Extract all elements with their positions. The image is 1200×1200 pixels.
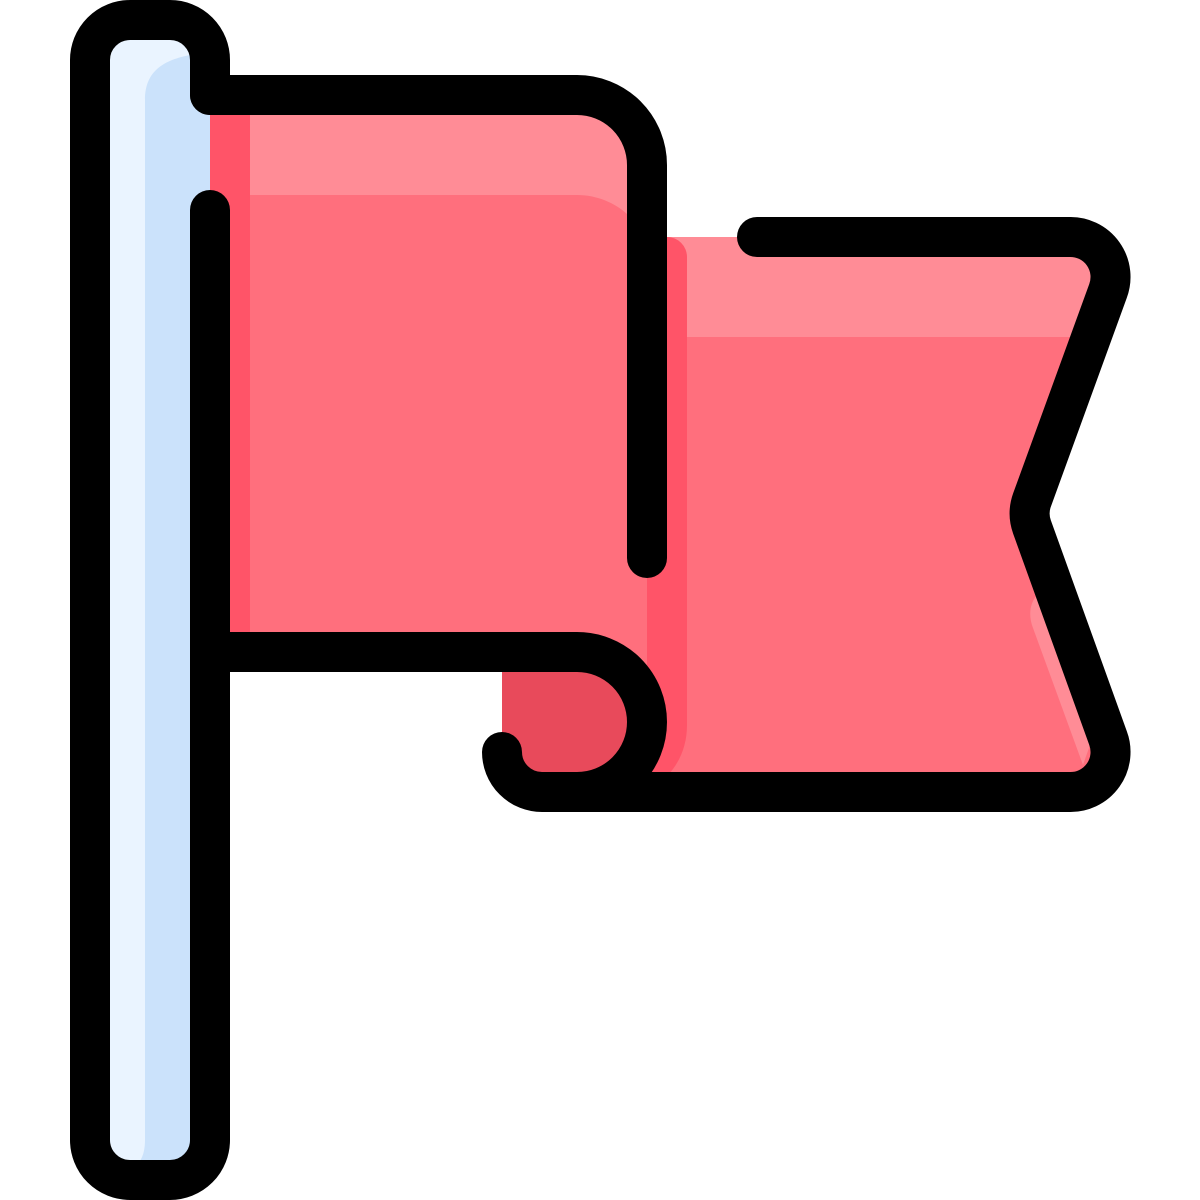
flag lower fold curl: [210, 652, 647, 792]
flagpole outline: [90, 20, 210, 1180]
flag top and fold edge: [210, 95, 647, 558]
flag fold shadow: [502, 652, 647, 792]
flag swallowtail edge: [502, 237, 1111, 792]
flag rear panel: [600, 237, 1111, 792]
flag front panel: [210, 95, 647, 722]
flagpole fill: [90, 20, 210, 1180]
